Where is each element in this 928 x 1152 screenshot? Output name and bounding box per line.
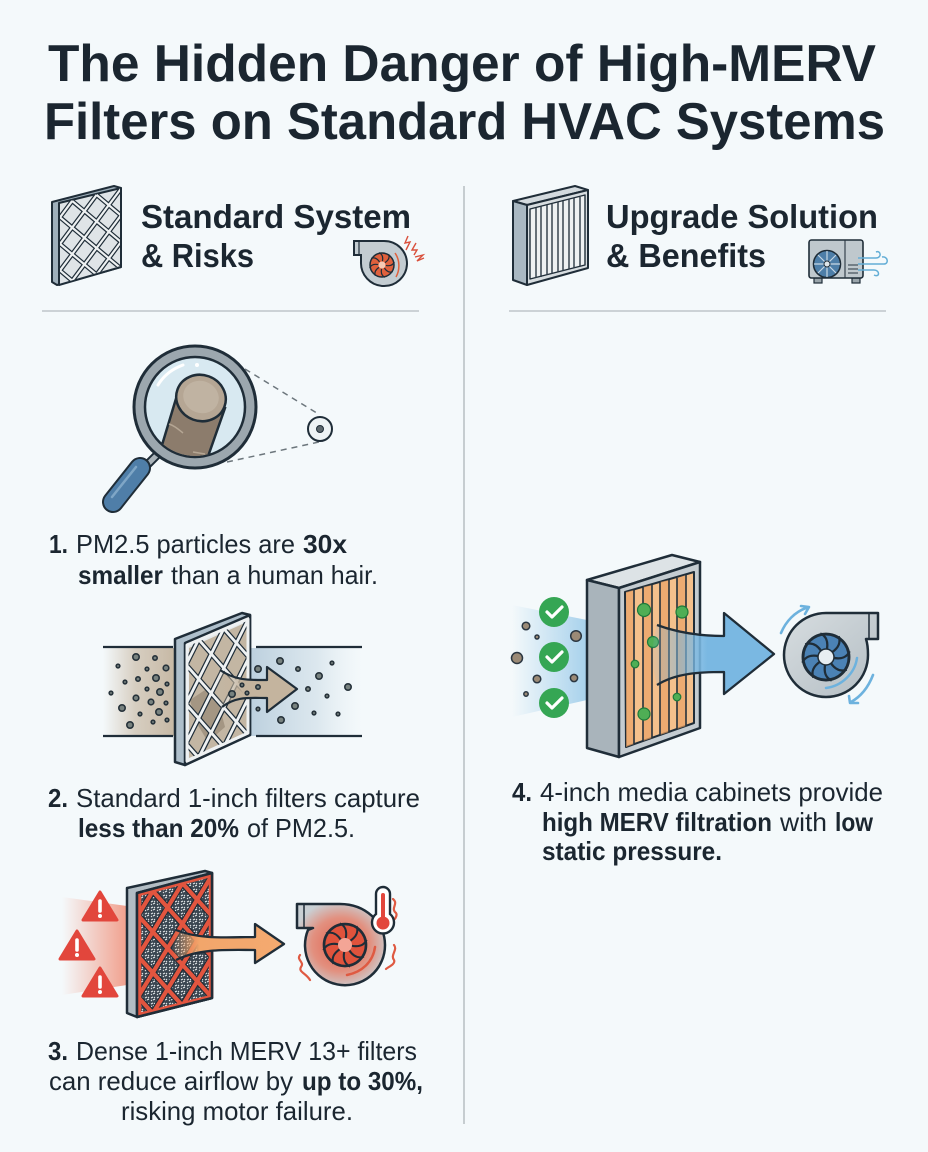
heading: standard system: Standard System xyxy=(141,198,411,235)
icon: blower with free airflow xyxy=(781,606,878,703)
text: point 1: 30x xyxy=(303,529,348,559)
text: point 1: 1. xyxy=(49,529,68,559)
text: point 1: than a human hair. xyxy=(171,560,378,590)
text: point 4: 4-inch media cabinets provide xyxy=(540,777,883,807)
title: Filters on Standard HVAC Systems xyxy=(44,93,885,151)
illustration: dense filter restricting airflow to overheating motor xyxy=(60,871,397,1017)
icon: deep media filter xyxy=(513,186,588,285)
text: point 2: Standard 1-inch filters capture xyxy=(76,783,420,813)
text: point 2: 2. xyxy=(48,783,68,813)
text: point 4: with xyxy=(779,807,827,837)
heading: upgrade solution xyxy=(606,198,878,274)
text: point 1: PM2.5 particles are xyxy=(76,529,295,559)
text: point 2: less than 20% xyxy=(78,813,239,843)
panel: standard system and risks xyxy=(48,186,424,1126)
icon: captured green particles xyxy=(631,604,688,720)
icon: warning triangles xyxy=(60,892,117,996)
text: point 3: 3. xyxy=(48,1036,68,1066)
text: point 2: of PM2.5. xyxy=(247,813,355,843)
text: point 4: high MERV filtration xyxy=(542,807,772,837)
illustration: standard filter in duct letting particles through xyxy=(103,613,362,765)
panel: upgrade solution and benefits xyxy=(512,186,887,866)
illustration: 4-inch media filter with high airflow to blower xyxy=(512,555,878,757)
text: point 3: can reduce airflow by xyxy=(49,1066,293,1096)
text: point 3: risking motor failure. xyxy=(121,1096,353,1126)
icon: overheating blower xyxy=(354,236,424,286)
text: point 4: low xyxy=(835,807,874,837)
heading: upgrade solution: Upgrade Solution xyxy=(606,198,878,235)
text: point 3: Dense 1-inch MERV 13+ filters xyxy=(76,1036,417,1066)
text: point 4: static pressure. xyxy=(542,836,722,866)
icon: outdoor AC unit with airflow xyxy=(809,240,887,283)
icon: green check badges xyxy=(539,597,569,718)
text: point 3: up to 30%, xyxy=(302,1066,423,1096)
heading: standard system xyxy=(141,198,411,274)
heading: standard system: & Risks xyxy=(141,237,254,274)
illustration: magnifying glass over human hair xyxy=(112,346,332,502)
heading: upgrade solution: & Benefits xyxy=(606,237,766,274)
title: The Hidden Danger of High-MERV xyxy=(48,35,876,93)
icon: standard pleated filter xyxy=(52,186,121,285)
text: point 1: smaller xyxy=(78,560,163,590)
icon: overheating blower motor xyxy=(297,887,397,985)
title xyxy=(44,35,885,151)
text: point 4: 4. xyxy=(512,777,532,807)
